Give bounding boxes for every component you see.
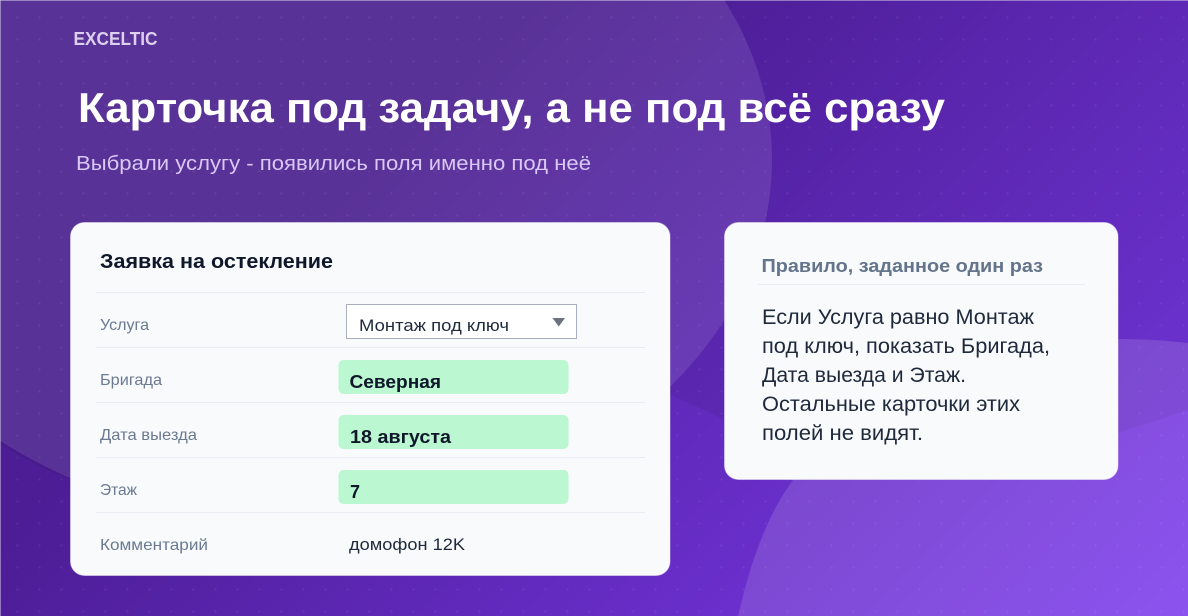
form heading: Заявка на остекление <box>100 251 333 273</box>
row: comment: Комментарий <box>100 537 208 554</box>
row: service <box>96 292 645 338</box>
row: floor <box>96 457 645 504</box>
rule heading: Правило, заданное один раз <box>762 256 1043 276</box>
row: comment <box>96 512 645 554</box>
row: comment: домофон 12K <box>349 535 466 554</box>
row: floor: Этаж <box>100 482 137 499</box>
rule text: полей не видят. <box>762 421 923 445</box>
row: crew: Бригада <box>100 372 162 389</box>
row: floor: 7 <box>350 482 360 502</box>
rule text: под ключ, показать Бригада, <box>762 334 1050 358</box>
rule text: Дата выезда и Этаж. <box>762 363 966 387</box>
panel: rule card <box>724 222 1118 480</box>
row: service: Услуга <box>100 317 149 334</box>
row: departure date: Дата выезда <box>100 427 197 444</box>
rule text: Если Услуга равно Монтаж <box>762 305 1035 329</box>
subtitle: Выбрали услугу - появились поля именно под неё <box>76 152 591 175</box>
row: crew <box>96 347 645 394</box>
row: departure date <box>96 402 645 449</box>
row: service: Монтаж под ключ <box>359 316 509 335</box>
brand name: EXCELTIC <box>74 29 158 49</box>
panel: request form card <box>70 222 670 576</box>
row: crew: Северная <box>350 372 441 392</box>
rule text <box>762 305 1050 445</box>
title: Карточка под задачу, а не под всё сразу <box>78 84 946 131</box>
row: departure date: 18 августа <box>350 427 452 447</box>
rule text: Остальные карточки этих <box>762 392 1020 416</box>
